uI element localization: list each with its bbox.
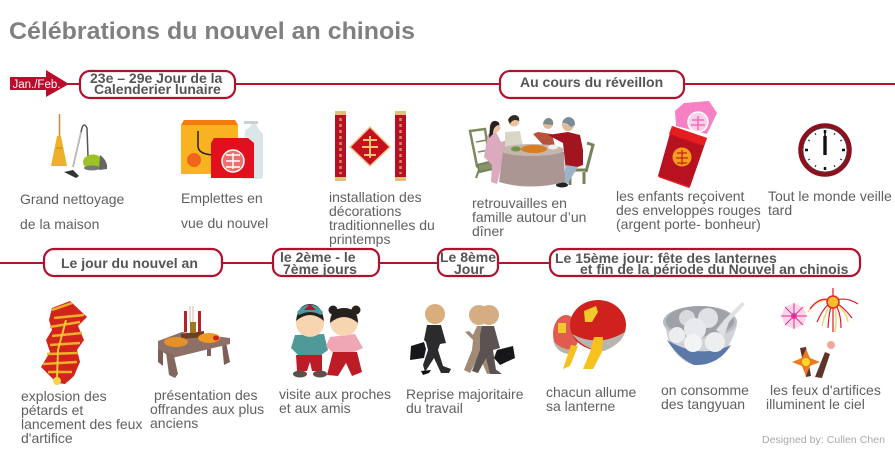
text: enveloppes: les enfants reçoivent bbox=[616, 188, 744, 204]
text: présentation: présentation des bbox=[154, 387, 258, 403]
text: explosion: pétards et bbox=[21, 402, 83, 418]
text: visite: et aux amis bbox=[279, 400, 351, 416]
icon: offering table bbox=[158, 306, 230, 378]
credit: Designed by: Cullen Chen bbox=[762, 434, 885, 446]
text: enveloppes: (argent porte- bonheur) bbox=[616, 216, 761, 232]
heading: 23e – 29e Jour de la Calenderier lunaire: Calenderier lunaire bbox=[94, 81, 221, 97]
text: lanterne: sa lanterne bbox=[546, 398, 615, 414]
text: visite: visite aux proches bbox=[279, 386, 391, 402]
icon: fireworks bbox=[781, 288, 858, 378]
text: présentation: offrandes aux plus bbox=[150, 401, 264, 417]
text: enveloppes: des enveloppes rouges bbox=[616, 202, 761, 218]
text: installation: décorations bbox=[329, 203, 401, 219]
icon: children greeting bbox=[291, 304, 363, 378]
text: Grand nettoyage: de la maison bbox=[20, 216, 99, 232]
icon: red envelope bbox=[658, 101, 717, 188]
text: lanterne: chacun allume bbox=[546, 384, 636, 400]
heading: Le jour du nouvel an: Le jour du nouvel an bbox=[61, 255, 198, 271]
text: Emplettes: Emplettes en bbox=[181, 190, 263, 206]
text: veille tard: Tout le monde veille bbox=[768, 188, 892, 204]
heading: Au cours du réveillon bbox=[500, 71, 684, 98]
text: feux d'artifices: illuminent le ciel bbox=[766, 396, 865, 412]
icon: shopping bags and bottle bbox=[181, 120, 263, 179]
text: explosion: lancement des feux bbox=[21, 416, 142, 432]
text: tangyuan: des tangyuan bbox=[661, 396, 745, 412]
text: Reprise: du travail bbox=[406, 400, 463, 416]
heading: Le 8ème Jour: Le 8ème bbox=[440, 249, 496, 265]
icon: spring couplets bbox=[335, 111, 406, 181]
text: retrouvailles: famille autour d’un bbox=[472, 209, 586, 225]
heading: 23e – 29e Jour de la Calenderier lunaire bbox=[80, 70, 235, 98]
heading: Le jour du nouvel an bbox=[44, 249, 222, 276]
heading: Le 15ème jour: et fin de la période du Nouvel an chinois bbox=[580, 261, 849, 277]
heading: Le 8ème Jour bbox=[438, 249, 498, 277]
title: Célébrations du nouvel an chinois bbox=[9, 18, 415, 45]
icon: business people walking bbox=[410, 304, 515, 375]
icon: red lanterns bbox=[553, 300, 626, 369]
heading: le 2ème - le 7ème jours: 7ème jours bbox=[283, 261, 357, 277]
text: installation: traditionnelles du bbox=[329, 217, 435, 233]
text: tangyuan: on consomme bbox=[661, 382, 749, 398]
heading: le 2ème - le 7ème jours bbox=[273, 249, 379, 277]
heading: Le 15ème jour: Le 15ème jour: fête des lanternes bbox=[555, 250, 777, 266]
heading: Le 15ème jour bbox=[550, 249, 860, 277]
text: Reprise: Reprise majoritaire bbox=[406, 386, 523, 402]
heading: 23e – 29e Jour de la Calenderier lunaire: 23e – 29e Jour de la bbox=[90, 70, 223, 86]
heading: Le 8ème Jour: Jour bbox=[454, 261, 485, 277]
text: présentation: anciens bbox=[150, 415, 198, 431]
arrow: Jan./Feb.: Jan./Feb. bbox=[12, 79, 60, 91]
text: retrouvailles: dîner bbox=[472, 223, 504, 239]
icon: bowl of tangyuan bbox=[663, 302, 745, 365]
text: explosion: d'artifice bbox=[21, 430, 73, 446]
text: Grand nettoyage: Grand nettoyage bbox=[20, 191, 124, 207]
icon: family reunion dinner bbox=[470, 115, 593, 188]
text: veille tard: tard bbox=[768, 202, 792, 218]
text: Emplettes: vue du nouvel bbox=[181, 215, 268, 231]
text: installation: printemps bbox=[329, 231, 390, 247]
text: retrouvailles: retrouvailles en bbox=[472, 195, 567, 211]
text: explosion: explosion des bbox=[21, 388, 107, 404]
arrow: Jan./Feb. bbox=[10, 70, 69, 97]
icon: clock bbox=[800, 126, 850, 174]
icon: broom and vacuum cleaner bbox=[51, 114, 107, 178]
text: feux d'artifices: les feux d'artifices bbox=[770, 382, 881, 398]
icon: firecrackers bbox=[41, 301, 87, 385]
heading: le 2ème - le 7ème jours: le 2ème - le bbox=[280, 249, 356, 265]
text: installation: installation des bbox=[329, 189, 422, 205]
heading: Au cours du réveillon: Au cours du réveillon bbox=[520, 74, 663, 90]
